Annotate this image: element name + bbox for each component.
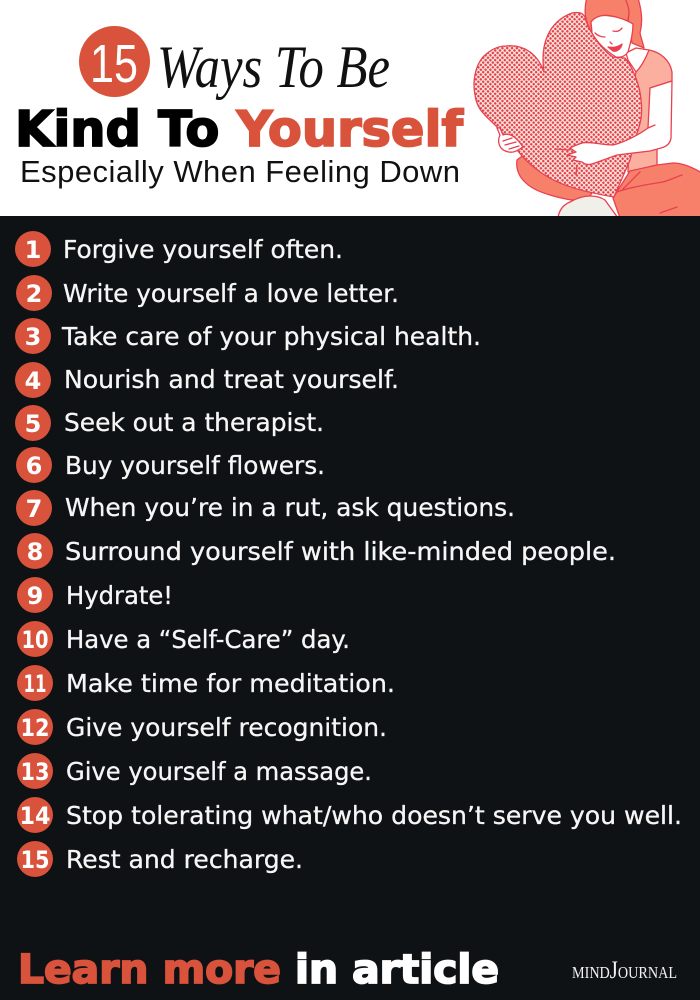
illustration: woman hugging heart [474,0,700,218]
item 13: 13 [20,758,50,786]
item 5 [15,405,324,441]
item 6 [16,447,325,483]
item 11: Make time for meditation. [66,669,395,698]
item 10: 10 [22,626,48,654]
call to action: Learn more in article: in article [295,947,499,993]
item 14: Stop tolerating what/who doesn’t serve you well. [66,801,682,830]
heart [474,12,642,197]
right leg [613,163,700,218]
item 8: 8 [27,538,43,566]
item 3: Take care of your physical health. [61,322,481,351]
item 11 [17,665,395,701]
subheading: Especially When Feeling Down [20,154,460,189]
item 1: 1 [25,236,41,264]
item 10 [17,621,350,657]
item 2 [16,275,399,311]
title block [15,26,464,189]
front hair [585,0,629,33]
item 3: 3 [25,323,41,351]
header panel [0,0,700,216]
item 1: Forgive yourself often. [63,235,343,264]
item 12: Give yourself recognition. [66,713,387,742]
mouth [608,44,622,51]
item 12 [17,709,387,745]
item 13 [17,753,372,789]
shirt [628,50,672,172]
arm and near hand [567,81,672,164]
badge: 15: 15 [90,34,138,94]
far hand [497,128,523,152]
left leg [517,150,600,200]
item 4: Nourish and treat yourself. [64,365,399,394]
arm and finger lines [555,125,655,175]
item 7: 7 [26,495,42,523]
heading: Kind To Yourself: Kind To Yourself [15,101,464,158]
item 5: 5 [25,410,41,438]
item 11: 11 [24,670,46,698]
facial features [595,28,622,44]
item 4: 4 [25,367,41,395]
heading: Ways To Be: Ways To Be [157,34,390,100]
item 8: Surround yourself with like-minded people. [65,537,616,566]
foot [558,196,618,218]
item 15 [17,841,303,877]
call to action: Learn more in article [18,947,499,993]
neck and chest [626,48,649,72]
item 7: When you’re in a rut, ask questions. [65,493,515,522]
back hair [625,0,644,48]
item 6: Buy yourself flowers. [65,451,325,480]
item 9: 9 [27,582,43,610]
list of 15 ways [15,231,682,877]
item 14: 14 [20,802,50,830]
dark list panel [0,216,700,1000]
logo: MindJournal: MINDJOURNAL [572,957,677,984]
leg folds [617,172,682,213]
item 2: Write yourself a love letter. [63,279,399,308]
item 5: Seek out a therapist. [64,408,324,437]
call to action: Learn more in article: Learn more [18,947,281,993]
item 6: 6 [26,452,42,480]
item 15: Rest and recharge. [66,845,303,874]
item 1 [15,231,343,267]
item 9: Hydrate! [66,581,173,610]
item 4 [15,362,399,398]
item 9 [17,577,173,613]
item 10: Have a “Self-Care” day. [66,625,350,654]
item 13: Give yourself a massage. [66,757,372,786]
item 12: 12 [20,714,50,742]
item 15: 15 [20,846,50,874]
face [591,15,633,57]
item 2: 2 [26,280,42,308]
